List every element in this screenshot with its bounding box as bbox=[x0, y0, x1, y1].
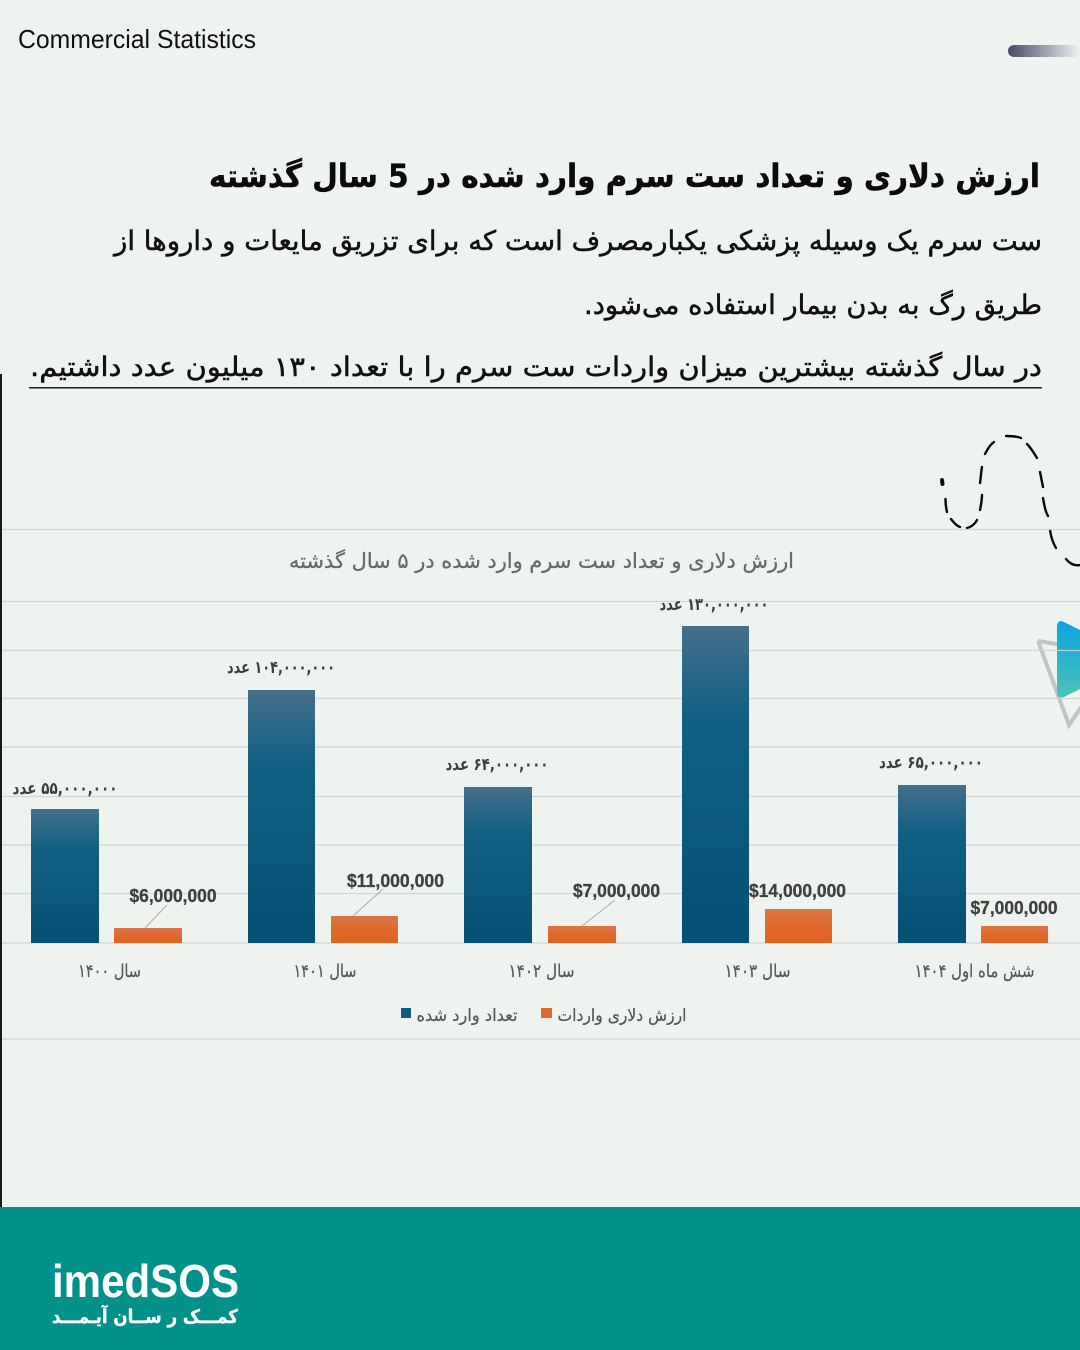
section label: Commercial Statistics bbox=[18, 24, 256, 54]
brand logo: کمـــک ر ســان آیـمـــد bbox=[52, 1304, 239, 1328]
count labels bbox=[12, 595, 983, 799]
bars: 1400 bbox=[31, 809, 182, 943]
icon: dashed curve bbox=[942, 436, 1080, 565]
legend bbox=[401, 1006, 686, 1026]
count labels: ۶۴,۰۰۰,۰۰۰ عدد bbox=[446, 755, 548, 775]
bars: 1401 bbox=[248, 690, 398, 943]
icon: blue triangle bbox=[1057, 621, 1080, 697]
leader lines bbox=[145, 889, 615, 928]
decorative pill bbox=[1008, 45, 1080, 57]
category labels: شش ماه اول ۱۴۰۴ bbox=[915, 961, 1034, 982]
dollar labels: $14,000,000 bbox=[749, 881, 846, 901]
intro text bbox=[112, 226, 1042, 321]
heading: ارزش دلاری و تعداد ست سرم وارد شده در 5 سال گذشته bbox=[209, 157, 1040, 195]
count labels: ۶۵,۰۰۰,۰۰۰ عدد bbox=[879, 753, 983, 773]
chart title: ارزش دلاری و تعداد ست سرم وارد شده در ۵ سال گذشته bbox=[289, 549, 794, 573]
category labels: سال ۱۴۰۳ bbox=[724, 961, 790, 982]
dollar labels: $11,000,000 bbox=[347, 871, 444, 891]
icon: triangle outline bbox=[1038, 641, 1080, 725]
brand logo: imedSOS bbox=[52, 1255, 239, 1307]
category labels bbox=[78, 961, 1034, 982]
highlighted sentence: در سال گذشته بیشترین میزان واردات ست سرم را با تعداد ۱۳۰ میلیون عدد داشتیم. bbox=[30, 351, 1042, 383]
bar chart bbox=[12, 595, 1058, 982]
bars: 1402 bbox=[464, 787, 616, 943]
left edge rule bbox=[0, 374, 2, 1207]
brand logo bbox=[52, 1255, 239, 1328]
intro text: طریق رگ به بدن بیمار استفاده می‌شود. bbox=[584, 289, 1042, 321]
count labels: ۱۰۴,۰۰۰,۰۰۰ عدد bbox=[227, 658, 335, 678]
legend: imported count: تعداد وارد شده bbox=[416, 1006, 518, 1026]
footer band bbox=[0, 1207, 1080, 1350]
count labels: ۵۵,۰۰۰,۰۰۰ عدد bbox=[12, 779, 118, 799]
intro text: ست سرم یک وسیله پزشکی یکبارمصرف است که برای تزریق مایعات و داروها از bbox=[112, 226, 1042, 257]
chart grid lines bbox=[2, 530, 1080, 1039]
dollar labels bbox=[130, 871, 1058, 918]
dollar labels: $7,000,000 bbox=[970, 898, 1058, 918]
category labels: سال ۱۴۰۱ bbox=[294, 961, 356, 982]
category labels: سال ۱۴۰۰ bbox=[78, 961, 141, 982]
dollar labels: $6,000,000 bbox=[130, 886, 216, 906]
category labels: سال ۱۴۰۲ bbox=[508, 961, 574, 982]
bars: first six months of 1404 bbox=[898, 785, 1048, 943]
legend: import dollar value: ارزش دلاری واردات bbox=[558, 1006, 686, 1026]
dollar labels: $7,000,000 bbox=[573, 881, 660, 901]
count labels: ۱۳۰,۰۰۰,۰۰۰ عدد bbox=[660, 595, 768, 615]
bars: 1403 bbox=[682, 626, 832, 943]
